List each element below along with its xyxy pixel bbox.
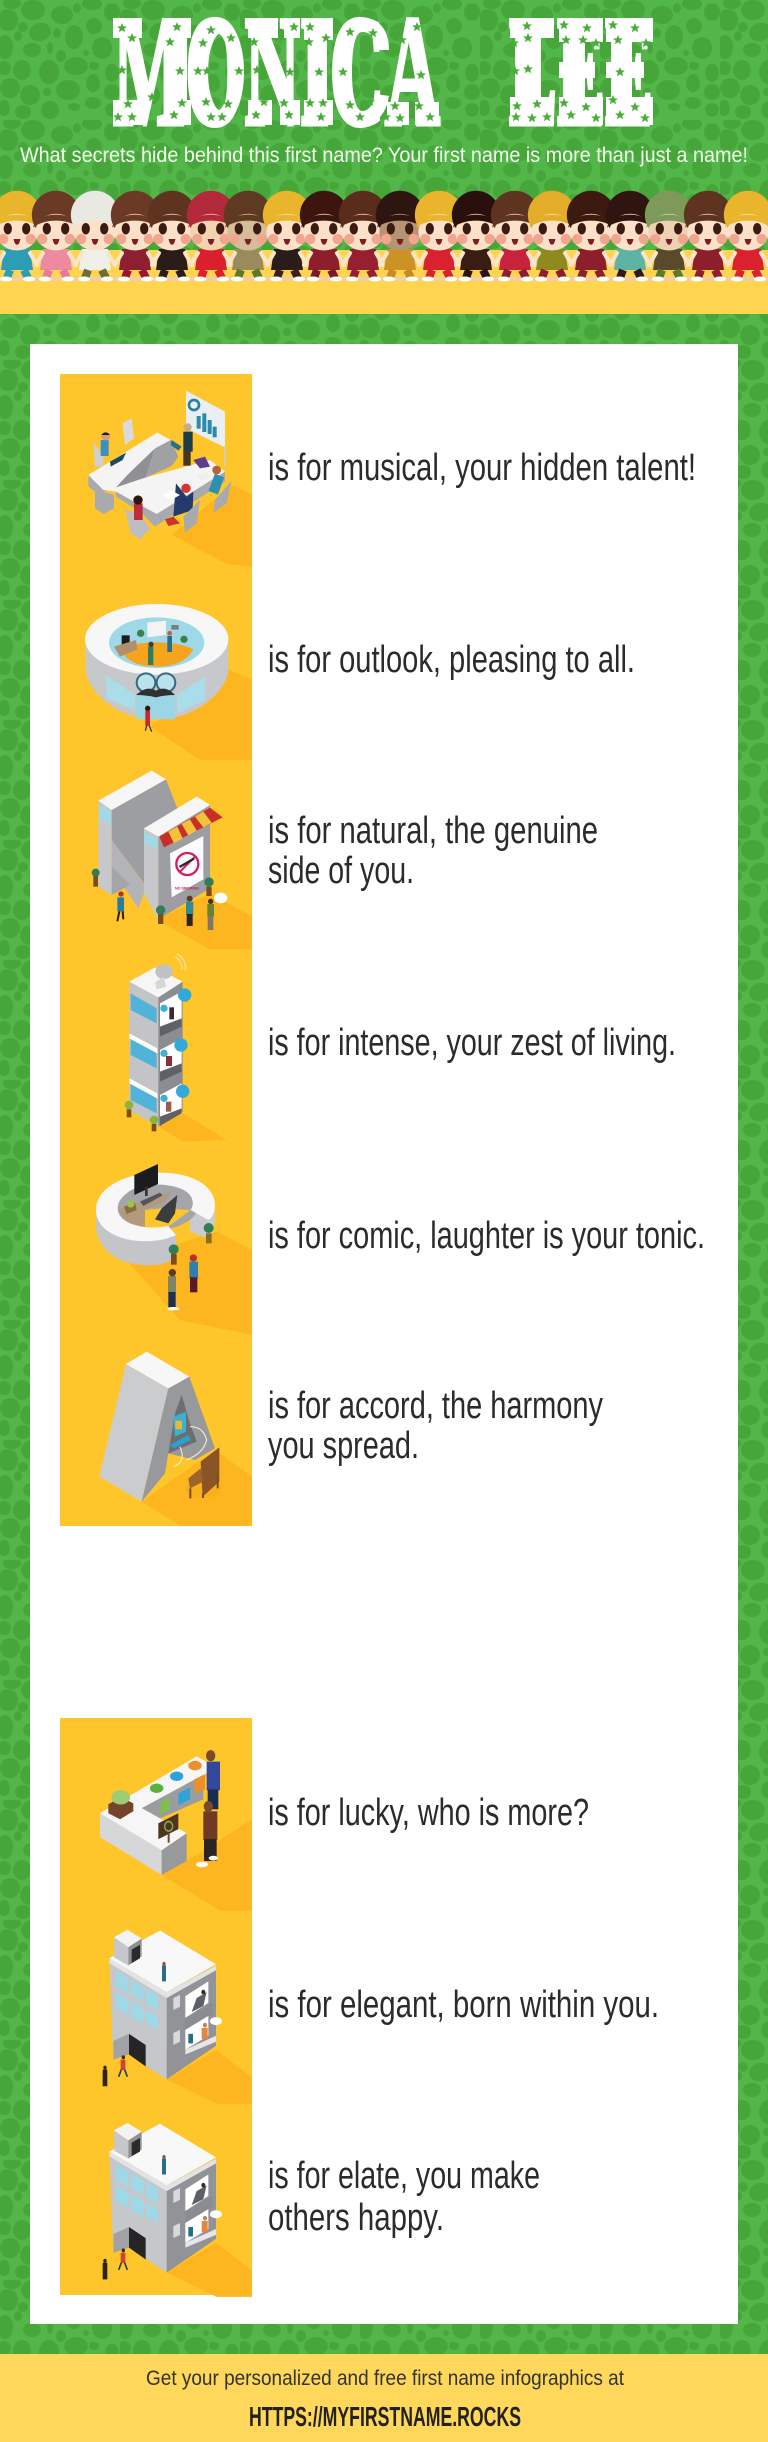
yellow strip 1 (60, 374, 252, 1526)
footer text: Get your personalized and free first name infographics at (146, 2367, 624, 2390)
icon: letter M meeting table (88, 391, 252, 567)
row of chibi characters (0, 191, 768, 282)
footer (0, 2354, 768, 2442)
panel: last name illustrations (60, 1718, 252, 2297)
text: E line: is for elegant, born within you. (268, 1984, 659, 2026)
text: N line (268, 810, 598, 892)
text: N line: is for natural, the genuine (268, 810, 598, 852)
main white panel (30, 344, 738, 2324)
text: E line two: others happy. (268, 2197, 444, 2239)
icon: letter E building second (103, 2123, 252, 2297)
yellow band under characters (0, 250, 768, 314)
icon: letter N shop building (92, 771, 252, 949)
icon: letter I tower (125, 954, 227, 1142)
icon: letter O optician shop (85, 604, 252, 760)
text: A line: is for accord, the harmony (268, 1385, 603, 1427)
icon: letter N shop building: NO SMOKING (175, 886, 199, 890)
text: N line: side of you. (268, 850, 414, 892)
text: O line: is for outlook, pleasing to all. (268, 639, 635, 681)
icon: letter A desk (99, 1352, 252, 1526)
text: E line two (268, 2155, 540, 2239)
icon: letter L recycling counter (100, 1750, 252, 1911)
icon: letter C reception desk (96, 1164, 252, 1335)
header (0, 0, 768, 314)
panel: first name illustrations (60, 374, 252, 1526)
icon: letter E building (103, 1930, 252, 2104)
footer url: HTTPS://MYFIRSTNAME.ROCKS (249, 2401, 521, 2432)
text: L line: is for lucky, who is more? (268, 1792, 589, 1834)
yellow strip 2 (60, 1718, 252, 2295)
text: E line two: is for elate, you make (268, 2155, 540, 2197)
text: A line (268, 1385, 603, 1467)
text: A line: you spread. (268, 1425, 419, 1467)
